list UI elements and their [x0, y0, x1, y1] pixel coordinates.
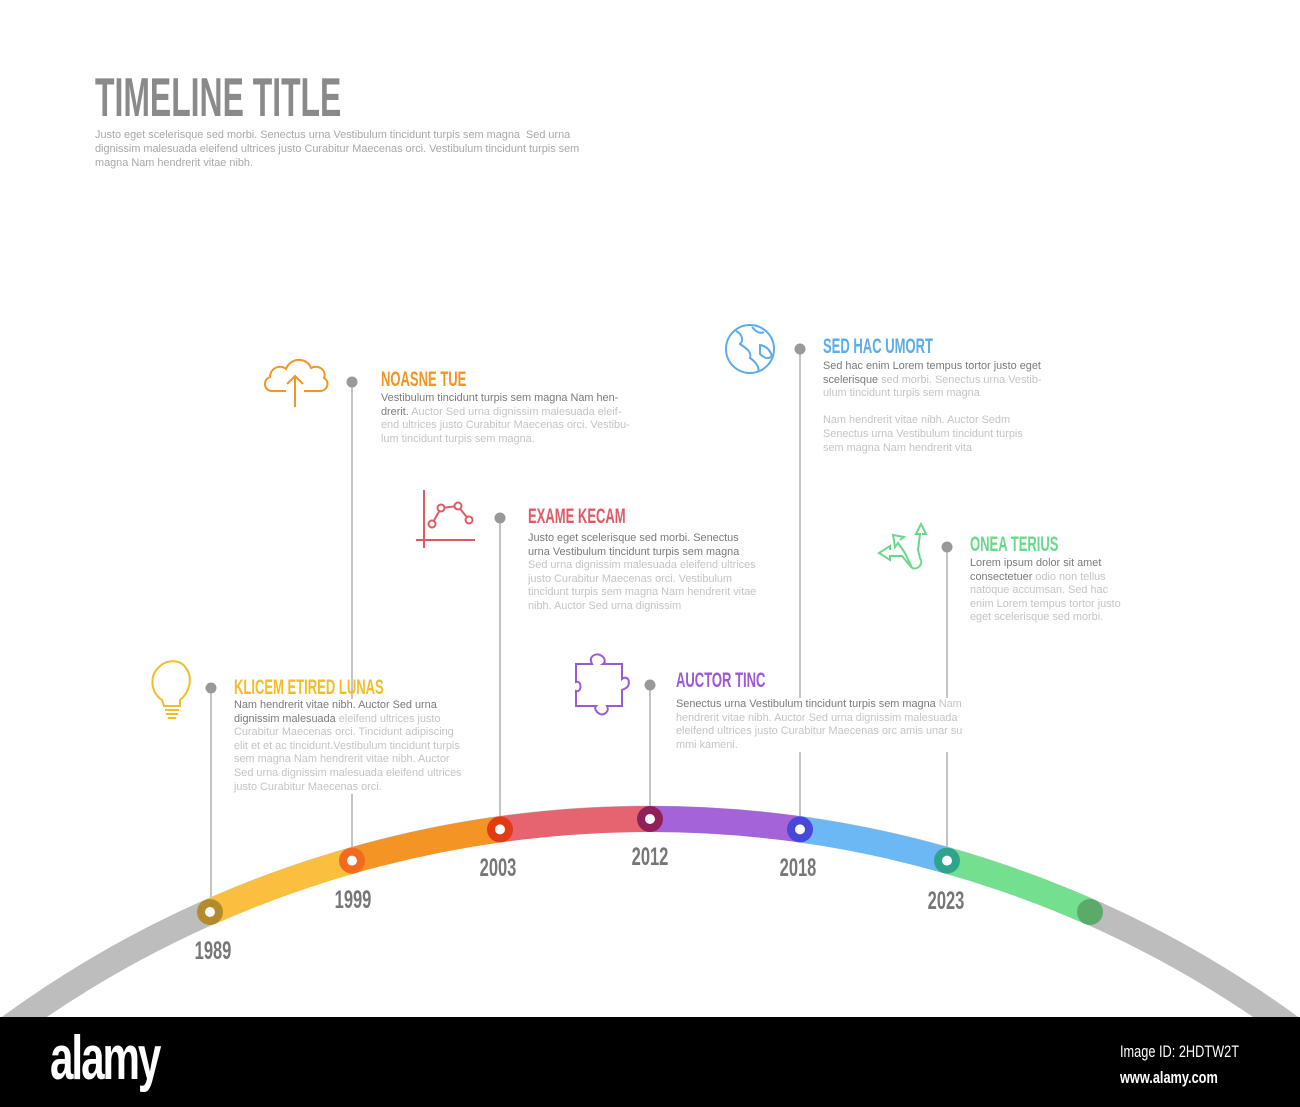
text: 2023: consectetuer odio non tellus: [970, 571, 1106, 583]
text: 2023: natoque accumsan. Sed hac: [970, 584, 1108, 596]
heading: 1999: NOASNE TUE: [381, 368, 466, 391]
text: 1999: drerit. Auctor Sed urna dignissim malesuada eleif-: [381, 406, 621, 418]
icon: diverging arrows: [879, 524, 926, 568]
text: 1999: lum tincidunt turpis sem magna.: [381, 433, 535, 445]
connector lines: [211, 349, 947, 912]
connector dots: [206, 344, 952, 694]
text: 2012: eleifend ultrices justo Curabitur Maecenas orc amis unar su: [676, 725, 962, 737]
text: 2018: scelerisque sed morbi. Senectus urna Vestib-: [823, 374, 1042, 386]
icon: globe: [726, 325, 774, 373]
text: 2018: Sed hac enim Lorem tempus tortor justo eget: [823, 360, 1041, 372]
icon: light bulb: [152, 661, 190, 718]
text: 2018: [823, 360, 1042, 455]
text: 1989: sem magna Nam hendrerit vitae nibh. Auctor: [234, 753, 450, 765]
text: 1989: Curabitur Maecenas orci. Tincidunt adipiscing: [234, 726, 454, 738]
year labels: 1989: [195, 937, 231, 965]
heading: 2012: AUCTOR TINC: [676, 669, 765, 692]
year labels: 1999: [335, 886, 371, 914]
footer info: Image ID: 2HDTW2T: [1120, 1042, 1239, 1061]
text: 2003: justo Curabitur Maecenas orci. Vestibulum: [528, 573, 732, 585]
intro text: Justo eget scelerisque sed morbi. Senectus urna Vestibulum tincidunt turpis sem magna Sed urna: [95, 129, 570, 141]
text: 2012: [676, 698, 966, 752]
text: 2018: Nam hendrerit vitae nibh. Auctor Sedm: [823, 414, 1010, 426]
title: TIMELINE TITLE: [95, 66, 341, 128]
text: 2018: Senectus urna Vestibulum tincidunt turpis: [823, 428, 1023, 440]
icon: puzzle piece: [576, 654, 629, 714]
text: 2018: ulum tincidunt turpis sem magna: [823, 387, 980, 399]
text: 2012: Senectus urna Vestibulum tincidunt turpis sem magna Nam: [676, 698, 962, 710]
heading: 2003: EXAME KECAM: [528, 505, 626, 528]
text: 1999: Vestibulum tincidunt turpis sem magna Nam hen-: [381, 392, 618, 404]
icon: line chart: [416, 490, 475, 548]
colored arc segments: [210, 819, 1090, 912]
year labels: 2003: [480, 854, 516, 882]
text: 2003: nibh. Auctor Sed urna dignissim: [528, 600, 681, 612]
text: 2023: enim Lorem tempus tortor justo: [970, 598, 1121, 610]
footer bar: [0, 1017, 1300, 1107]
year labels: 2018: [780, 854, 816, 882]
icon: cloud upload: [265, 360, 327, 407]
text: 1999: end ultrices justo Curabitur Maecenas orci. Vestibu-: [381, 419, 630, 431]
gray arc: [0, 819, 1300, 1042]
text: 1989: [234, 699, 462, 794]
year labels: 2012: [632, 843, 668, 871]
text: 2003: tincidunt turpis sem magna Nam hendrerit vitae: [528, 586, 756, 598]
text: 1989: elit et et ac tincidunt.Vestibulum tincidunt turpis: [234, 740, 460, 752]
text: 2023: eget scelerisque sed morbi.: [970, 611, 1103, 623]
footer info: www.alamy.com: [1120, 1068, 1218, 1087]
year labels: 2023: [928, 887, 964, 915]
text: 2003: urna Vestibulum tincidunt turpis sem magna: [528, 546, 739, 558]
heading: 2018: SED HAC UMORT: [823, 335, 933, 358]
text: 2012: mmi kameni.: [676, 739, 738, 751]
intro text: [95, 129, 579, 169]
footer info: [1120, 1042, 1239, 1087]
heading: 1989: KLICEM ETIRED LUNAS: [234, 676, 384, 699]
footer logo: alamy: [50, 1024, 159, 1093]
text: 1989: Sed urna dignissim malesuada eleifend ultrices: [234, 767, 462, 779]
text: 1999: [381, 392, 630, 446]
intro text: dignissim malesuada eleifend ultrices justo Curabitur Maecenas orci. Vestibulum tincidunt turpis sem: [95, 143, 579, 155]
text: 1989: Nam hendrerit vitae nibh. Auctor Sed urna: [234, 699, 437, 711]
text: 2003: Justo eget scelerisque sed morbi. Senectus: [528, 532, 739, 544]
text: 1989: dignissim malesuada eleifend ultrices justo: [234, 713, 440, 725]
text: 2003: [528, 532, 756, 614]
text: 2003: Sed urna dignissim malesuada eleifend ultrices: [528, 559, 756, 571]
text: 2018: sem magna Nam hendrerit vita: [823, 442, 972, 454]
heading: 2023: ONEA TERIUS: [970, 533, 1058, 556]
year markers: [197, 806, 1103, 925]
text: 2023: [970, 557, 1121, 625]
text: 2012: hendrerit vitae nibh. Auctor Sed urna dignissim malesuada: [676, 712, 958, 724]
intro text: magna Nam hendrerit vitae nibh.: [95, 157, 253, 169]
text: 2023: Lorem ipsum dolor sit amet: [970, 557, 1101, 569]
text: 1989: justo Curabitur Maecenas orci.: [234, 781, 382, 793]
